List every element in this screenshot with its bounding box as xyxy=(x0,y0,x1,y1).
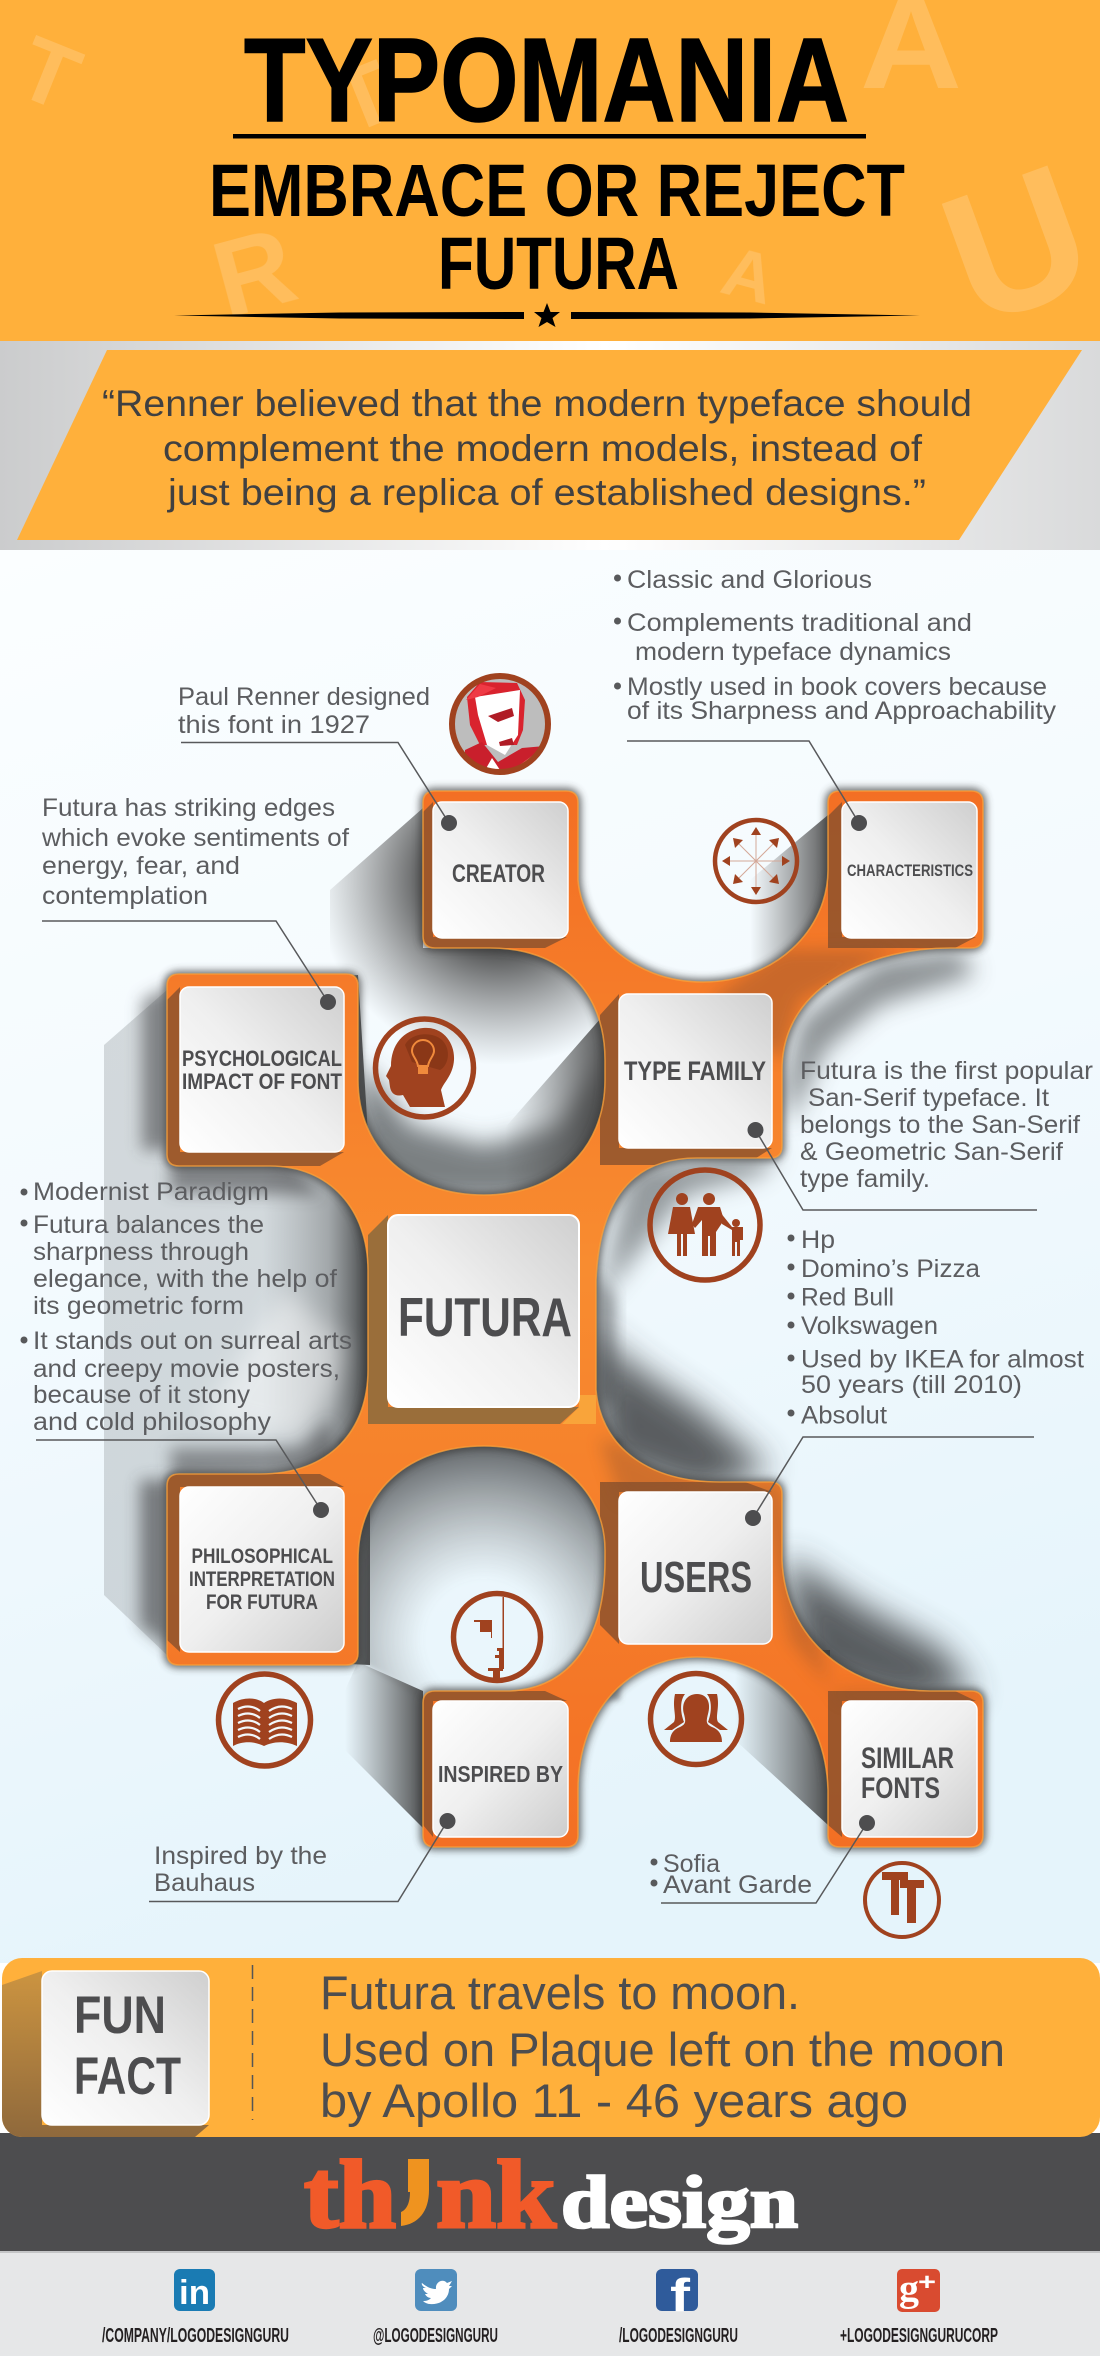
callout: philosophical interpretation: its geometric form xyxy=(33,1292,244,1320)
callout: type family: type family. xyxy=(800,1165,930,1193)
icon: portrait of Paul Renner xyxy=(452,676,548,772)
card: philosophical interpretation xyxy=(180,1487,344,1652)
callout: inspired by: Bauhaus xyxy=(154,1869,255,1897)
callout: type family: Futura is the first popular xyxy=(800,1057,1093,1085)
social: facebook xyxy=(619,2269,738,2347)
footer dark band xyxy=(0,2133,1100,2251)
callout: characteristics xyxy=(614,566,1057,831)
icon: users group xyxy=(650,1674,742,1764)
title: TYPOMANIA xyxy=(244,14,849,147)
fun fact panel: Used on Plaque left on the moon xyxy=(320,2023,1005,2076)
card: creator xyxy=(433,802,568,938)
social: google plus: +LOGODESIGNGURUCORP xyxy=(840,2325,998,2347)
icon: arrows xyxy=(715,820,797,902)
callout: users: Used by IKEA for almost xyxy=(801,1346,1084,1374)
logo xyxy=(304,2141,798,2249)
card: users xyxy=(619,1492,772,1644)
icon: open book xyxy=(218,1674,310,1766)
callout: psychological impact: contemplation xyxy=(42,882,208,910)
social: linkedin: in xyxy=(179,2274,210,2312)
fun fact panel: Futura travels to moon. xyxy=(320,1966,800,2019)
social: facebook: /LOGODESIGNGURU xyxy=(619,2325,738,2347)
icon: TT letters xyxy=(865,1863,939,1937)
card: type family xyxy=(619,994,772,1148)
social: google plus: g xyxy=(899,2268,919,2310)
card: similar fonts xyxy=(842,1701,977,1837)
callout: users: Absolut xyxy=(801,1402,887,1430)
callout: philosophical interpretation: and cold philosophy xyxy=(33,1408,272,1436)
social: twitter: @LOGODESIGNGURU xyxy=(373,2325,498,2347)
card: characteristics: CHARACTERISTICS xyxy=(847,861,973,880)
social band xyxy=(0,2251,1100,2356)
card: creator: CREATOR xyxy=(452,860,545,888)
card: philosophical interpretation: PHILOSOPHICAL xyxy=(192,1545,333,1568)
icon: family xyxy=(650,1170,760,1280)
quote panel: complement the modern models, instead of xyxy=(163,428,923,469)
logo: design xyxy=(561,2162,798,2244)
card: psychological impact of font: PSYCHOLOGICAL xyxy=(182,1046,342,1071)
social: twitter xyxy=(373,2269,498,2347)
callout: similar fonts xyxy=(650,1815,875,1903)
callout: type family xyxy=(748,1057,1093,1210)
card: futura centre: FUTURA xyxy=(398,1286,572,1348)
callout: philosophical interpretation: Futura balances the xyxy=(33,1211,264,1239)
callout: inspired by: Inspired by the xyxy=(154,1842,327,1870)
card: psychological impact of font xyxy=(180,987,344,1152)
callout: characteristics: Complements traditional and xyxy=(627,609,972,637)
callout: characteristics: Mostly used in book covers because xyxy=(627,673,1047,701)
card: inspired by: INSPIRED BY xyxy=(438,1761,563,1787)
callout: philosophical interpretation: sharpness through xyxy=(33,1238,249,1266)
callout: users xyxy=(745,1226,1084,1526)
quote panel xyxy=(17,350,1082,540)
card: users: USERS xyxy=(640,1553,752,1602)
fun fact card: FUN xyxy=(74,1986,166,2045)
fun fact panel: by Apollo 11 - 46 years ago xyxy=(320,2074,908,2127)
callout: users: Hp xyxy=(801,1226,835,1254)
subtitle line 1: EMBRACE OR REJECT xyxy=(209,149,905,232)
social: google plus xyxy=(840,2268,998,2347)
quote band xyxy=(0,341,1100,550)
logo: th xyxy=(304,2141,396,2249)
card: similar fonts: FONTS xyxy=(861,1772,940,1805)
social: facebook: f xyxy=(670,2269,691,2321)
callout: characteristics: modern typeface dynamics xyxy=(635,638,951,666)
callout: characteristics: of its Sharpness and Approachability xyxy=(627,697,1057,725)
callout: philosophical interpretation: and creepy movie posters, xyxy=(33,1355,340,1383)
decorative background letters: T xyxy=(320,41,407,153)
logo: nk xyxy=(436,2141,557,2249)
callout: psychological impact: which evoke sentiments of xyxy=(41,824,349,852)
callout: philosophical interpretation: It stands out on surreal arts xyxy=(33,1327,352,1355)
title underline xyxy=(233,134,866,138)
callout: creator: this font in 1927 xyxy=(178,711,370,739)
callout: users: Red Bull xyxy=(801,1284,894,1312)
callout: creator xyxy=(178,683,457,831)
callout: philosophical interpretation xyxy=(20,1178,352,1518)
card: futura centre xyxy=(388,1215,579,1407)
card: philosophical interpretation: INTERPRETATION xyxy=(189,1568,335,1591)
quote panel: “Renner believed that the modern typeface should xyxy=(102,383,972,424)
fun fact panel xyxy=(2,1958,1100,2137)
quote panel: just being a replica of established designs.” xyxy=(167,472,926,513)
callout: psychological impact xyxy=(41,794,349,1010)
callout: type family: & Geometric San-Serif xyxy=(800,1138,1063,1166)
social: linkedin xyxy=(102,2269,289,2347)
callout: philosophical interpretation: elegance, with the help of xyxy=(33,1265,337,1293)
callout: users: 50 years (till 2010) xyxy=(801,1371,1022,1399)
icon: Bauhaus face xyxy=(454,1594,540,1680)
decorative background letters: A xyxy=(714,231,783,320)
callout: similar fonts: Sofia xyxy=(663,1850,720,1878)
star divider xyxy=(174,303,920,327)
card: similar fonts: SIMILAR xyxy=(861,1742,954,1775)
card: philosophical interpretation: FOR FUTURA xyxy=(206,1591,318,1614)
card: inspired by xyxy=(433,1701,568,1837)
callout: similar fonts: Avant Garde xyxy=(663,1871,812,1899)
decorative background letters: R xyxy=(201,203,307,340)
branch connector shape xyxy=(167,791,983,1847)
callout: type family: San-Serif typeface. It xyxy=(808,1084,1049,1112)
callout: philosophical interpretation: Modernist Paradigm xyxy=(33,1178,269,1206)
social: google plus: + xyxy=(918,2269,936,2296)
callout: psychological impact: energy, fear, and xyxy=(42,852,240,880)
callout: users: Domino’s Pizza xyxy=(801,1255,980,1283)
fun fact card xyxy=(42,1971,209,2125)
callout: philosophical interpretation: because of it stony xyxy=(33,1381,251,1409)
callout: inspired by xyxy=(149,1813,456,1902)
card: type family: TYPE FAMILY xyxy=(624,1056,766,1086)
decorative background letters xyxy=(5,0,1100,366)
icon: head with light bulb xyxy=(376,1019,474,1117)
callout: creator: Paul Renner designed xyxy=(178,683,430,711)
shadows under the branch xyxy=(104,791,983,1847)
subtitle line 2: FUTURA xyxy=(438,222,679,305)
header background xyxy=(0,0,1100,341)
callout: type family: belongs to the San-Serif xyxy=(800,1111,1080,1139)
card: characteristics xyxy=(842,802,977,938)
callout: characteristics: Classic and Glorious xyxy=(627,566,872,594)
callout: users: Volkswagen xyxy=(801,1312,938,1340)
diagram background xyxy=(0,550,1100,1963)
card: psychological impact of font: IMPACT OF FONT xyxy=(182,1069,342,1094)
callout: psychological impact: Futura has striking edges xyxy=(42,794,335,822)
fun fact card: FACT xyxy=(74,2047,181,2106)
decorative background letters: T xyxy=(5,18,93,131)
social: linkedin: /COMPANY/LOGODESIGNGURU xyxy=(102,2325,289,2347)
